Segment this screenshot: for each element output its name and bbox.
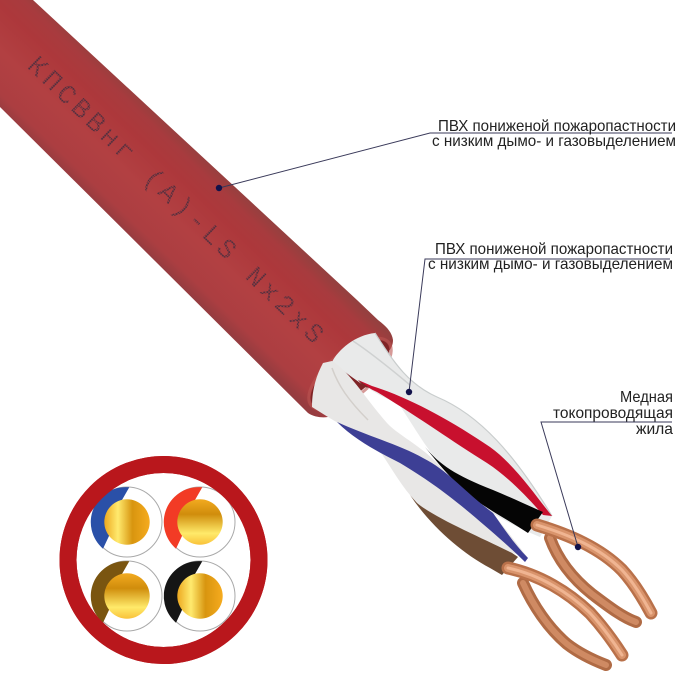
callout: outer sheath: с низким дымо- и газовыделением [432,133,676,150]
cable outer jacket [0,0,403,423]
copper conductors: lower pair [508,568,622,665]
conductor: brown [91,561,162,631]
callout: copper conductor: Медная [620,389,673,406]
copper conductors: upper pair [537,525,651,622]
cross-section diagram [68,464,259,656]
callout: outer sheath [216,118,676,191]
cross-section outer ring [68,464,259,656]
callout: wire insulation [406,241,673,395]
conductor: blue [91,487,162,557]
callout: copper conductor: токопроводящая [553,405,673,422]
callout: wire insulation: с низким дымо- и газовыделением [428,256,673,273]
callout: copper conductor [541,389,673,550]
callout: copper conductor: жила [636,421,673,438]
upper twisted pair: red and black insulated wires [332,333,552,537]
callout: wire insulation: ПВХ пониженой пожаропастности [435,241,673,258]
conductor: black [164,561,235,631]
lower twisted pair: brown and blue insulated wires [312,361,528,575]
cable marking text: КПСВВнг (А)-LS Nx2xS [20,52,328,351]
cross-section ring overlap [68,464,259,656]
conductor: red [164,487,235,557]
callout: outer sheath: ПВХ пониженой пожаропастности [438,118,676,135]
